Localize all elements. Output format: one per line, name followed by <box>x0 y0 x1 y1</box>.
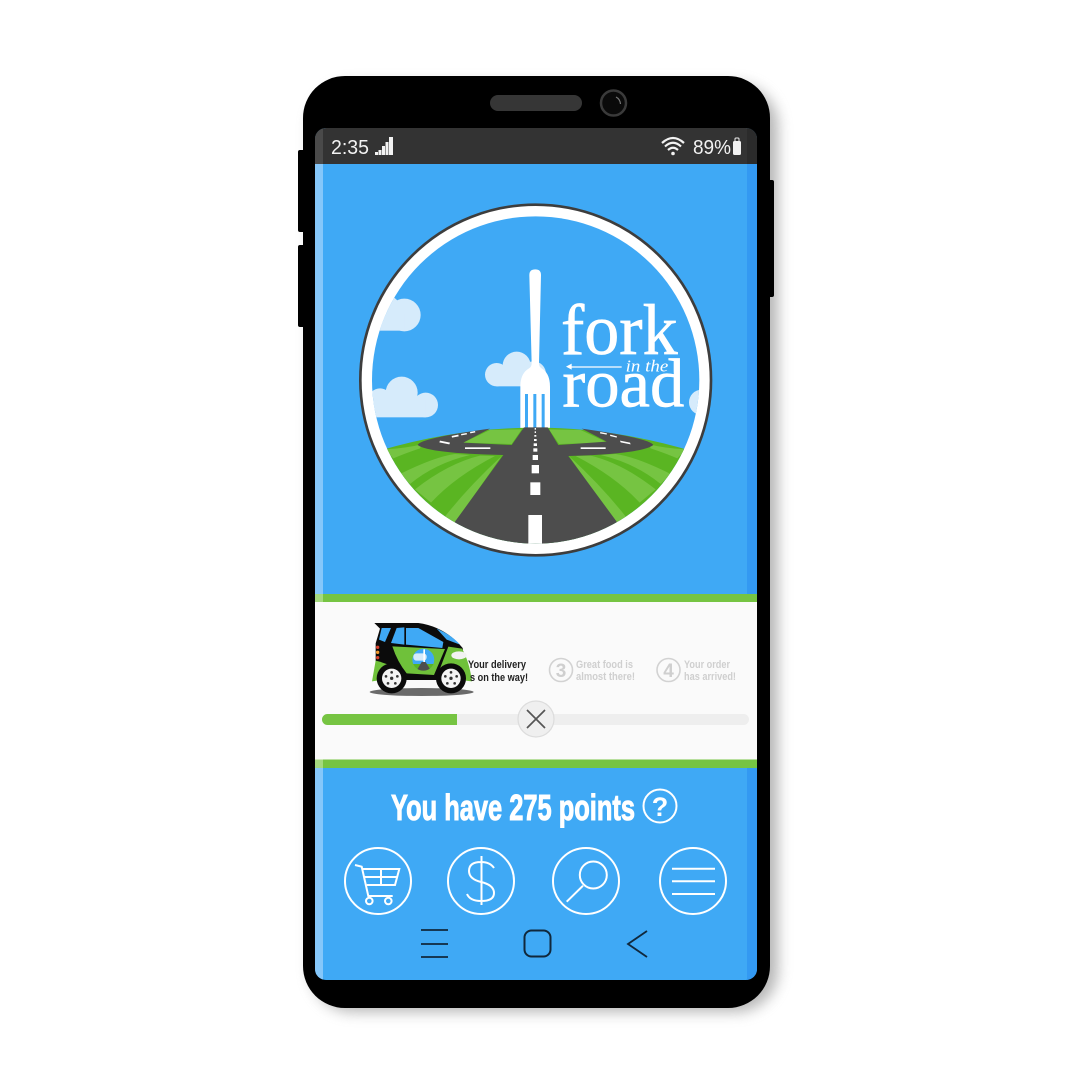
wordmark: fork in the road: road <box>562 345 684 422</box>
wordmark: fork in the road: in the <box>626 356 669 375</box>
field stripes <box>385 429 522 523</box>
car wheels <box>377 663 466 693</box>
camera <box>601 90 626 116</box>
phone mockup infographic <box>298 76 786 1020</box>
step 4: 4 <box>663 661 674 682</box>
car windows <box>379 627 460 648</box>
car shadow <box>370 688 474 696</box>
phone body <box>298 76 778 1012</box>
step 3 <box>550 658 635 683</box>
wordmark: fork in the road <box>561 290 684 422</box>
dollar button <box>448 848 514 914</box>
fork <box>520 269 550 428</box>
screen left highlight <box>315 164 323 980</box>
cloud right <box>689 390 699 414</box>
step 2 text: Your delivery <box>468 659 527 671</box>
battery icon <box>733 138 741 155</box>
step 2 text: s on the way! <box>470 672 528 684</box>
car body panels <box>372 646 472 681</box>
step 3: almost there! <box>576 671 635 683</box>
status bar <box>315 128 757 164</box>
delivery tracker band <box>315 594 757 768</box>
step 4 <box>657 658 736 683</box>
screen right shade <box>747 164 757 980</box>
cloud behind fork <box>485 352 546 387</box>
car silhouette <box>374 623 467 680</box>
road <box>418 427 654 544</box>
nav: home <box>524 930 550 956</box>
field stripes right <box>549 429 686 523</box>
status time: 2:35 <box>331 137 369 159</box>
delivery car <box>370 623 474 696</box>
logo badge <box>355 200 720 567</box>
progress bar <box>322 714 749 725</box>
wordmark: fork in the road: fork <box>561 290 678 370</box>
green ground <box>387 428 684 544</box>
help icon: ? <box>652 792 668 822</box>
menu button <box>660 848 726 914</box>
wifi icon <box>662 138 684 155</box>
cloud left top <box>380 298 421 332</box>
phone screen <box>315 128 757 980</box>
car door logo <box>412 649 435 672</box>
cloud left middle <box>372 376 438 418</box>
signal icon <box>375 137 393 155</box>
nav: recent apps <box>421 930 448 957</box>
car details <box>376 646 467 659</box>
nav: back <box>628 931 647 957</box>
cart button <box>345 848 411 914</box>
search button <box>553 848 619 914</box>
step 4: Your order <box>684 659 731 671</box>
step 2 text <box>468 659 528 684</box>
speaker <box>490 95 582 111</box>
step 4: has arrived! <box>684 671 736 683</box>
points text: You have 275 points <box>391 787 635 828</box>
road markings <box>439 428 631 552</box>
help icon <box>644 790 676 822</box>
close button <box>518 701 554 737</box>
battery percentage: 89% <box>693 137 731 159</box>
step 3: 3 <box>556 661 566 682</box>
step 3: Great food is <box>576 659 633 671</box>
arrow <box>566 364 622 370</box>
